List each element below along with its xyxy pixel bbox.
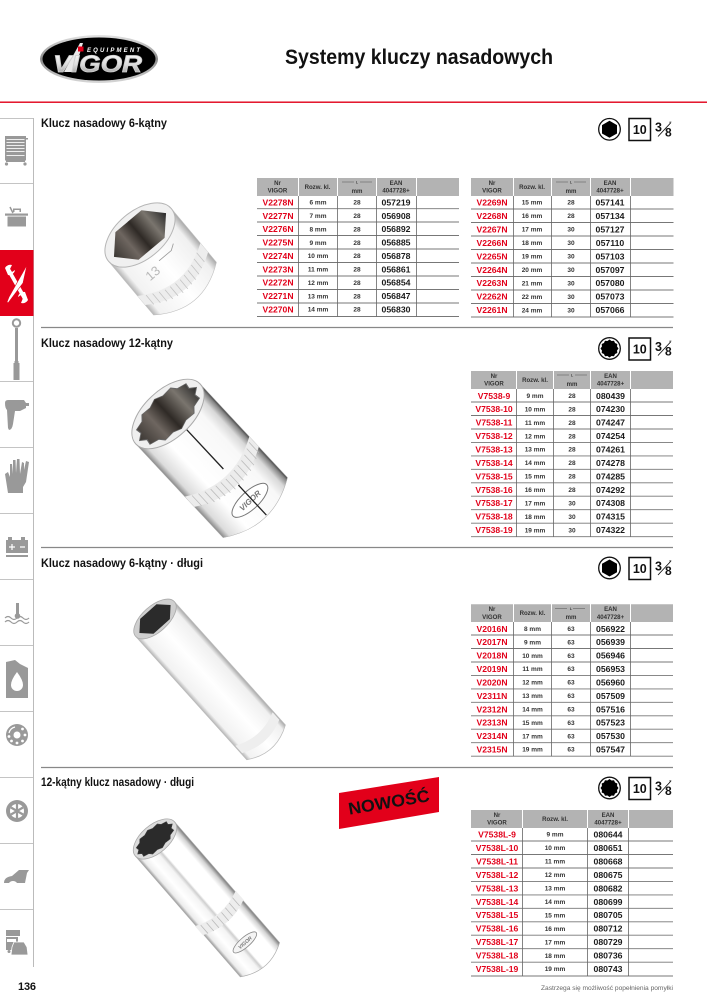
table header: EAN: [390, 180, 402, 187]
article numbers: V7538-15: [475, 471, 513, 481]
sizes: 8 mm: [524, 626, 541, 633]
lengths: 30: [567, 267, 575, 274]
article numbers: V2274N: [262, 251, 294, 261]
article numbers: V7538-10: [475, 404, 513, 414]
EAN codes: 056878: [382, 251, 411, 261]
table header: VIGOR: [482, 188, 502, 195]
EAN codes: 057134: [596, 211, 625, 221]
lengths: 28: [568, 433, 576, 440]
icon: toolbox: [5, 207, 28, 226]
lengths: 63: [567, 639, 575, 646]
article numbers: V2261N: [476, 305, 508, 315]
sizes: 17 mm: [545, 939, 566, 946]
new product badge: [339, 777, 439, 829]
icon: active wrench and screwdriver: [0, 250, 34, 316]
sizes: 20 mm: [522, 267, 543, 274]
lengths: 30: [568, 500, 576, 507]
EAN codes: 074254: [596, 431, 625, 441]
EAN codes: 057219: [382, 198, 411, 208]
table header: [471, 371, 673, 389]
article numbers: V7538L-9: [478, 830, 516, 840]
article numbers: V2311N: [477, 691, 507, 701]
EAN codes: 056830: [382, 304, 411, 314]
sizes: 12 mm: [545, 872, 566, 879]
section 3 heading: Klucz nasadowy 6-kątny · długi: [41, 557, 203, 570]
sizes: 8 mm: [310, 226, 327, 233]
lengths: 28: [567, 213, 575, 220]
EAN codes: 074261: [596, 444, 625, 454]
sizes: 14 mm: [545, 899, 566, 906]
table header: EAN: [602, 812, 614, 819]
sizes: 11 mm: [308, 266, 328, 274]
table header: 4047728+: [594, 820, 622, 827]
sizes: 13 mm: [522, 693, 543, 700]
EAN codes: 057080: [596, 278, 625, 288]
EAN codes: 080712: [594, 924, 623, 934]
icon: gloves: [5, 459, 29, 493]
EAN codes: 056885: [382, 238, 411, 248]
article numbers: V7538L-19: [476, 964, 518, 974]
EAN codes: 057516: [596, 704, 625, 714]
section 2 spec icons: 10: [633, 342, 647, 356]
article numbers: V2262N: [476, 292, 508, 302]
table header: L: [570, 180, 573, 184]
sizes: 14 mm: [308, 307, 329, 314]
socket photo: short 6-point: 13: [142, 263, 163, 284]
sizes: 9 mm: [547, 832, 564, 839]
table header: Nr: [491, 373, 498, 380]
table header: VIGOR: [487, 820, 507, 827]
section rules: [41, 328, 673, 768]
sizes: 18 mm: [522, 240, 543, 247]
EAN codes: 056960: [596, 677, 625, 687]
sizes: 17 mm: [522, 733, 543, 740]
lengths: 63: [567, 747, 575, 754]
EAN codes: 080729: [594, 937, 623, 947]
sizes: 10 mm: [525, 406, 546, 413]
EAN codes: 057097: [596, 265, 625, 275]
sizes: 12 mm: [522, 680, 543, 687]
lengths: 28: [353, 307, 361, 314]
socket photo: long 6-point: [127, 592, 291, 766]
EAN codes: 080675: [594, 870, 623, 880]
sizes: 15 mm: [525, 474, 546, 481]
sizes: 19 mm: [522, 747, 543, 754]
new product badge: NOWOŚĆ: [347, 786, 431, 819]
icon: impact wrench: [5, 400, 29, 430]
EAN codes: 080736: [594, 951, 623, 961]
lengths: 28: [353, 240, 361, 247]
lengths: 63: [567, 693, 575, 700]
EAN codes: 074322: [596, 525, 625, 535]
article numbers: V2271N: [262, 291, 294, 301]
lengths: 28: [568, 406, 576, 413]
article numbers: V2278N: [262, 198, 294, 208]
EAN codes: 057127: [596, 224, 625, 234]
table header: 4047728+: [597, 614, 625, 621]
article numbers: V7538-18: [475, 512, 513, 522]
sizes: 16 mm: [545, 926, 566, 933]
table header: mm: [566, 614, 577, 621]
icon: tool cabinet: [5, 136, 28, 166]
article numbers: V7538-14: [475, 458, 513, 468]
article numbers: V2313N: [476, 718, 508, 728]
table 4: [471, 604, 673, 756]
lengths: 28: [353, 200, 361, 207]
sizes: 9 mm: [310, 240, 327, 247]
EAN codes: 074292: [596, 485, 625, 495]
EAN codes: 057103: [596, 251, 625, 261]
sizes: 13 mm: [525, 447, 546, 454]
lengths: 63: [567, 706, 575, 714]
sizes: 10 mm: [522, 653, 543, 660]
EAN codes: 057530: [596, 731, 625, 741]
article numbers: V7538-16: [475, 485, 513, 495]
icon: coolant temperature: [5, 603, 29, 624]
footer note: Zastrzega się możliwość popełnienia pomyłki: [541, 985, 673, 992]
table header: [471, 604, 673, 622]
lengths: 30: [567, 240, 575, 247]
article numbers: V7538L-18: [476, 951, 518, 961]
article numbers: V7538L-12: [476, 870, 518, 880]
lengths: 28: [568, 393, 576, 400]
sizes: 11 mm: [522, 666, 543, 673]
lengths: 28: [353, 266, 361, 274]
sizes: 15 mm: [545, 912, 566, 919]
table header: 4047728+: [596, 188, 624, 195]
article numbers: V2276N: [262, 224, 294, 234]
section 1 spec icons: 8: [665, 125, 672, 139]
sizes: 13 mm: [545, 886, 566, 892]
socket photo: short 12-point: [119, 366, 297, 548]
table header: Rozw. kl.: [305, 184, 331, 191]
sizes: 16 mm: [525, 487, 546, 494]
table header: VIGOR: [484, 381, 504, 388]
article numbers: V7538L-11: [476, 856, 518, 866]
lengths: 28: [353, 226, 361, 233]
EAN codes: 057523: [596, 718, 625, 728]
article numbers: V2268N: [476, 211, 508, 221]
section 3 spec icons: 10: [633, 562, 647, 576]
EAN codes: 080651: [594, 843, 623, 853]
article numbers: V2267N: [476, 224, 508, 234]
table header: EAN: [604, 373, 617, 380]
lengths: 28: [568, 420, 576, 427]
sizes: 17 mm: [525, 500, 546, 507]
table header: Rozw. kl.: [522, 377, 548, 384]
section 1 spec icons: 10: [633, 123, 647, 137]
lengths: 30: [567, 294, 575, 301]
article numbers: V2016N: [476, 624, 508, 634]
EAN codes: 056861: [382, 264, 411, 274]
EAN codes: 080743: [594, 964, 623, 974]
EAN codes: 057066: [596, 305, 625, 315]
section 2 spec icons: 3: [655, 340, 662, 354]
EAN codes: 074315: [596, 512, 625, 522]
EAN codes: 056908: [382, 211, 411, 221]
EAN codes: 056854: [382, 278, 411, 288]
article numbers: V7538-13: [475, 444, 513, 454]
lengths: 30: [567, 254, 575, 260]
article numbers: V7538L-15: [476, 910, 518, 920]
article numbers: V2265N: [476, 251, 508, 261]
sizes: 14 mm: [522, 706, 543, 714]
table header: mm: [567, 381, 578, 388]
table header: L: [570, 606, 573, 611]
EAN codes: 057547: [596, 744, 625, 754]
sidebar navigation: [0, 118, 34, 967]
table header: EAN: [604, 606, 617, 613]
EAN codes: 080644: [594, 830, 623, 840]
EAN codes: 056939: [596, 637, 625, 647]
sizes: 10 mm: [545, 845, 566, 852]
table 5: [471, 810, 673, 976]
EAN codes: 056953: [596, 664, 625, 674]
icon: truck and car: [6, 930, 28, 955]
sizes: 11 mm: [525, 420, 545, 427]
section 2 spec icons: 8: [665, 344, 672, 358]
EAN codes: 074308: [596, 498, 625, 508]
table header: L: [356, 180, 359, 184]
article numbers: V2315N: [476, 744, 508, 754]
article numbers: V2272N: [262, 278, 294, 288]
article numbers: V7538-17: [475, 498, 513, 508]
EAN codes: 056922: [596, 624, 625, 634]
EAN codes: 074285: [596, 471, 625, 481]
EAN codes: 074230: [596, 404, 625, 414]
EAN codes: 074278: [596, 458, 625, 468]
lengths: 28: [567, 200, 575, 207]
table header: [471, 810, 673, 828]
section 3 spec icons: 8: [665, 564, 672, 578]
table header: Nr: [274, 180, 282, 187]
article numbers: V7538-9: [478, 391, 510, 401]
EAN codes: 080699: [594, 897, 623, 907]
table header: mm: [566, 188, 577, 195]
EAN codes: 080682: [594, 883, 623, 893]
article numbers: V2018N: [476, 651, 508, 661]
table header: 4047728+: [382, 188, 410, 195]
EAN codes: 057509: [596, 691, 625, 701]
sizes: 13 mm: [308, 293, 329, 300]
article numbers: V2263N: [476, 278, 508, 288]
article numbers: V7538L-10: [476, 843, 518, 853]
article numbers: V2277N: [262, 211, 294, 221]
article numbers: V2264N: [476, 265, 508, 275]
logo: VIGOR Equipment: VIGOR: [53, 51, 143, 78]
article numbers: V2270N: [262, 304, 294, 314]
table header: Nr: [489, 606, 496, 613]
table header: EAN: [604, 180, 616, 187]
EAN codes: 056847: [382, 291, 411, 301]
sizes: 9 mm: [524, 639, 541, 646]
section 4 spec icons: [599, 777, 672, 800]
EAN codes: 080668: [594, 856, 623, 866]
socket photo: long 12-point: [125, 811, 286, 984]
EAN codes: 074247: [596, 418, 625, 428]
article numbers: V7538-11: [476, 418, 513, 428]
section 4 spec icons: ″: [669, 780, 672, 786]
EAN codes: 080439: [596, 391, 625, 401]
table header: Nr: [494, 812, 501, 819]
lengths: 28: [568, 460, 576, 467]
table header: Rozw. kl.: [519, 184, 545, 191]
article numbers: V7538-12: [475, 431, 513, 441]
sizes: 10 mm: [308, 253, 329, 260]
lengths: 30: [567, 307, 575, 314]
socket photo: long 12-point: VIGOR: [237, 935, 254, 951]
article numbers: V2269N: [476, 198, 508, 208]
article numbers: V7538L-13: [476, 883, 518, 893]
section 4 spec icons: 3: [655, 780, 662, 794]
icon: tyre: [6, 800, 28, 822]
section 3 spec icons: 3: [655, 560, 662, 574]
lengths: 63: [567, 680, 575, 687]
page number: 136: [18, 981, 36, 993]
sizes: 16 mm: [522, 213, 543, 220]
lengths: 30: [568, 527, 576, 534]
title: Systemy kluczy nasadowych: [285, 46, 553, 69]
article numbers: V2275N: [262, 238, 294, 248]
lengths: 63: [567, 666, 575, 673]
table 3: [471, 371, 673, 537]
section 1 heading: Klucz nasadowy 6-kątny: [41, 117, 168, 130]
sizes: 15 mm: [522, 720, 543, 727]
icon: torque wrench: [13, 319, 20, 380]
sizes: 17 mm: [522, 227, 543, 234]
section 1 spec icons: 3: [655, 121, 662, 135]
table header: VIGOR: [268, 188, 288, 195]
icon: oil canister: [6, 660, 28, 698]
table header: VIGOR: [482, 614, 502, 621]
sizes: 19 mm: [545, 966, 566, 973]
sizes: 9 mm: [527, 393, 544, 400]
sizes: 14 mm: [525, 460, 546, 467]
EAN codes: 057110: [596, 238, 624, 248]
sizes: 18 mm: [525, 514, 546, 521]
article numbers: V2312N: [476, 704, 508, 714]
section 4 spec icons: 8: [665, 784, 672, 798]
lengths: 28: [568, 474, 576, 481]
lengths: 28: [353, 213, 361, 220]
socket photo: short 12-point: VIGOR: [238, 488, 263, 513]
EAN codes: 056946: [596, 651, 625, 661]
EAN codes: 080705: [594, 910, 623, 920]
section 2 spec icons: ″: [669, 341, 672, 347]
table header: mm: [352, 188, 363, 195]
article numbers: V7538L-17: [476, 937, 518, 947]
lengths: 30: [567, 280, 575, 287]
table header: 4047728+: [597, 381, 625, 388]
sizes: 6 mm: [310, 200, 327, 207]
socket photo: short 6-point: [93, 190, 226, 326]
section 1 spec icons: [599, 118, 672, 140]
EAN codes: 057141: [596, 198, 625, 208]
icon: brake disc: [6, 724, 28, 746]
header rule: [0, 102, 707, 103]
section 1 spec icons: ″: [669, 122, 672, 128]
table header: Rozw. kl.: [542, 816, 568, 823]
article numbers: V2019N: [476, 664, 508, 674]
lengths: 30: [567, 227, 575, 234]
lengths: 28: [353, 253, 361, 260]
lengths: 28: [353, 293, 361, 300]
sizes: 19 mm: [522, 254, 543, 260]
lengths: 28: [353, 280, 361, 287]
lengths: 63: [567, 720, 575, 727]
section 4 spec icons: 10: [633, 782, 647, 796]
article numbers: V7538-19: [475, 525, 513, 535]
article numbers: V2017N: [476, 637, 508, 647]
article numbers: V2020N: [476, 677, 508, 687]
table header: Nr: [489, 180, 496, 187]
table header: Rozw. kl.: [520, 610, 546, 617]
article numbers: V2266N: [476, 238, 508, 248]
sizes: 15 mm: [522, 200, 543, 207]
article numbers: V7538L-14: [476, 897, 518, 907]
lengths: 30: [568, 514, 576, 521]
sizes: 24 mm: [522, 307, 543, 314]
article numbers: V2314N: [476, 731, 508, 741]
sizes: 7 mm: [310, 213, 327, 220]
lengths: 28: [568, 447, 576, 454]
sizes: 18 mm: [545, 953, 566, 960]
lengths: 63: [567, 653, 575, 660]
icon: battery: [6, 537, 28, 557]
section 2 spec icons: [599, 338, 672, 360]
table 2: [471, 178, 674, 317]
EAN codes: 056892: [382, 224, 411, 234]
section 4 heading: 12-kątny klucz nasadowy · długi: [41, 776, 194, 789]
article numbers: V2273N: [262, 264, 294, 274]
sizes: 12 mm: [525, 433, 546, 440]
sizes: 11 mm: [545, 859, 565, 866]
logo: VIGOR Equipment: EQUIPMENT: [87, 48, 141, 54]
lengths: 63: [567, 733, 575, 740]
sizes: 21 mm: [522, 280, 543, 287]
table header: L: [571, 372, 574, 378]
section 3 spec icons: ″: [669, 560, 672, 566]
table 1: [257, 178, 459, 316]
section 3 spec icons: [599, 557, 672, 580]
lengths: 63: [567, 626, 575, 633]
icon: car body: [4, 870, 29, 883]
section 2 heading: Klucz nasadowy 12-kątny: [41, 337, 174, 350]
table header: [471, 178, 674, 196]
table header: [257, 178, 459, 196]
EAN codes: 057073: [596, 292, 625, 302]
sizes: 19 mm: [525, 527, 546, 534]
sizes: 22 mm: [522, 294, 543, 301]
article numbers: V7538L-16: [476, 924, 518, 934]
logo: VIGOR Equipment: [40, 35, 158, 83]
lengths: 28: [568, 487, 576, 494]
sizes: 12 mm: [308, 280, 329, 287]
